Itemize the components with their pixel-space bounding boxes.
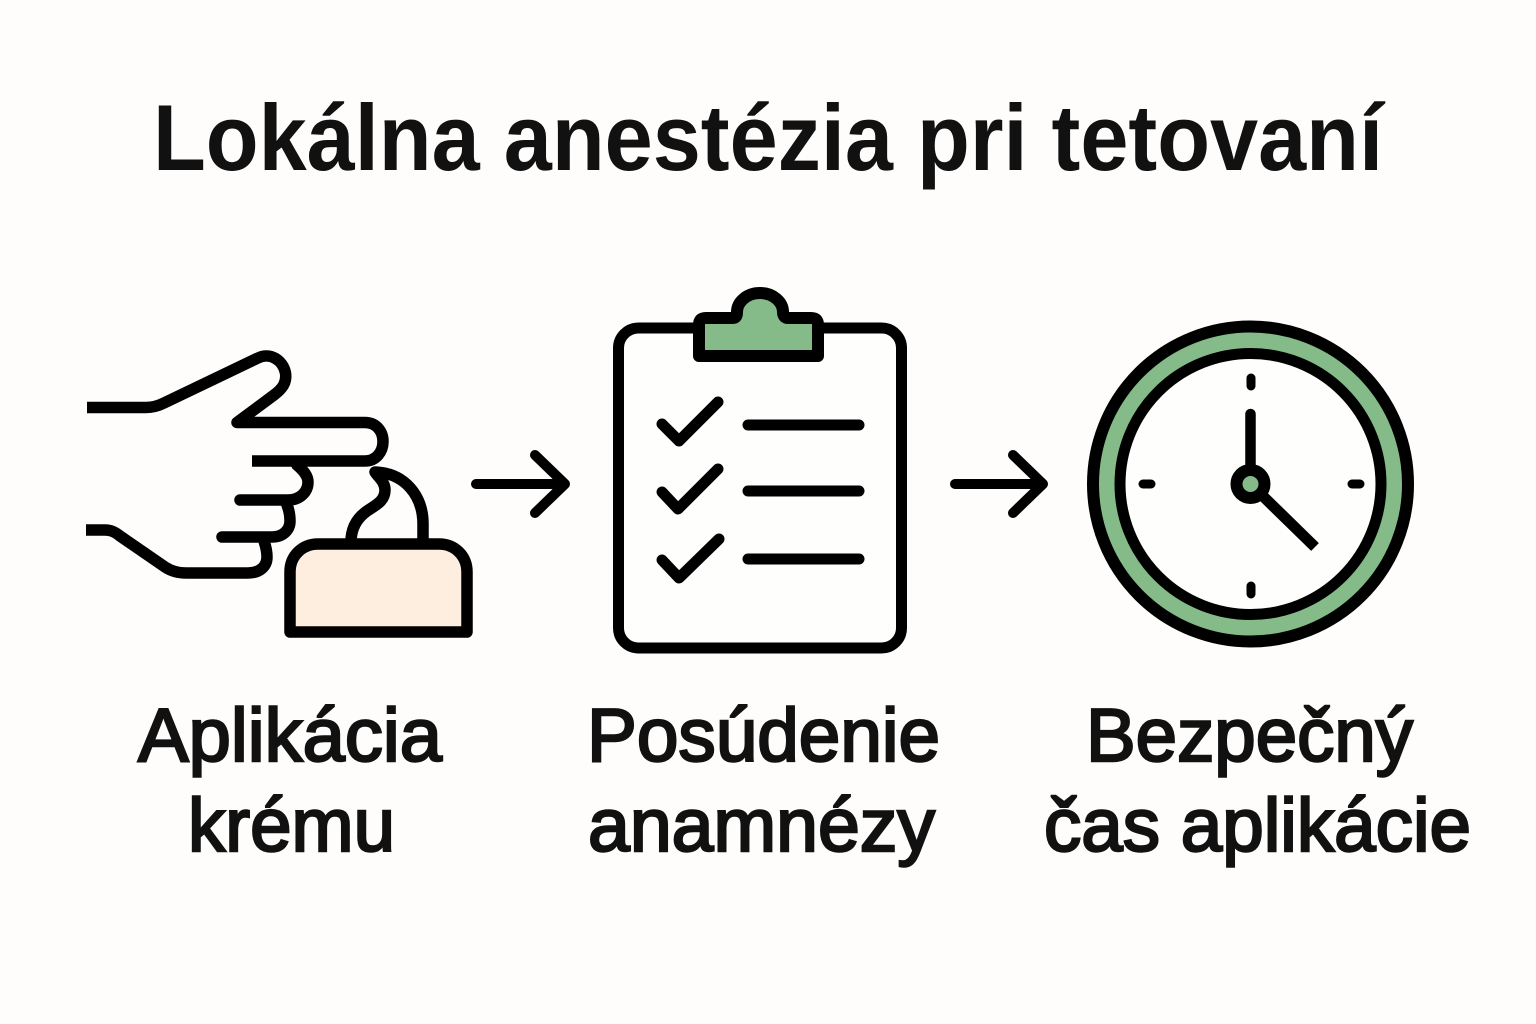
icon: clock inner rim: [1120, 354, 1381, 614]
icon: checklist row 1: [662, 402, 859, 441]
label: step 3: Bezpečný: [1086, 693, 1413, 777]
icon: checklist row 3: [662, 539, 859, 578]
label: step 2: Posúdenie: [587, 693, 940, 777]
label: step 3: [1044, 693, 1471, 867]
step 1: cream application: [86, 356, 467, 632]
icon: clock outer rim: [1093, 326, 1408, 642]
icon: clock face: [1124, 358, 1376, 610]
step 2: medical history clipboard: [618, 293, 902, 648]
icon: cream jar: [290, 544, 467, 632]
icon: clipboard board: [618, 328, 902, 648]
label: step 2: [587, 693, 940, 867]
label: step 1: krému: [188, 783, 395, 867]
step 3: clock: [1093, 326, 1408, 642]
title: Lokálna anestézia pri tetovaní: [153, 85, 1386, 190]
icon: minute hand: [1250, 484, 1315, 547]
label: step 2: anamnézy: [588, 783, 935, 867]
icon: checklist row 2: [662, 469, 859, 509]
icon: clipboard clip: [699, 293, 818, 356]
arrow: step 2 to step 3: [955, 455, 1043, 513]
icon: hour ticks: [1143, 378, 1360, 594]
label: step 1: Aplikácia: [138, 693, 442, 777]
arrow: step 1 to step 2: [476, 455, 565, 513]
icon: cream swirl: [351, 472, 423, 542]
icon: hour hand: [1245, 414, 1256, 484]
icon: green clock ring: [1106, 340, 1394, 628]
icon: clock centre: [1236, 470, 1264, 498]
label: step 1: [138, 693, 442, 867]
icon: hand: [86, 356, 383, 573]
label: step 3: čas aplikácie: [1044, 783, 1471, 867]
